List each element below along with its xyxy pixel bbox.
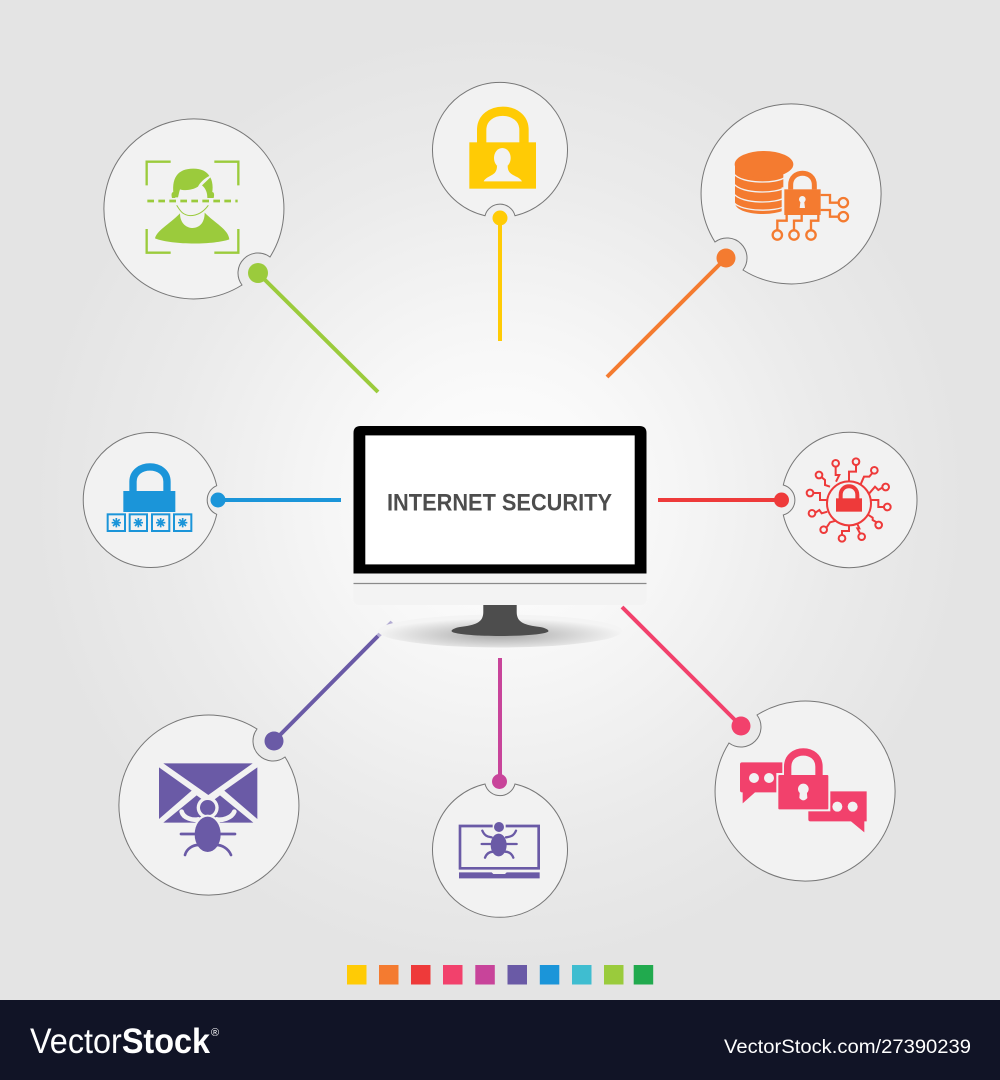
connector dot: red [774, 492, 789, 508]
connector dot: green [248, 263, 268, 283]
panel: email virus [119, 715, 299, 895]
icon: circuit padlock [807, 458, 891, 542]
title: INTERNET SECURITY [387, 490, 612, 516]
connector: orange [607, 258, 726, 377]
icon: padlock with password [108, 467, 191, 531]
panel: network lock [774, 432, 917, 568]
connector: yellow [498, 217, 502, 341]
colour legend [347, 965, 653, 984]
registered mark: ® [211, 1027, 219, 1039]
footer url: VectorStock.com/27390239 [724, 1036, 971, 1058]
connector dot: pink [732, 716, 750, 736]
panel: laptop virus [432, 774, 568, 917]
footer bar [0, 1000, 1000, 1080]
connector dot: magenta [492, 774, 507, 789]
monitor shadow [378, 614, 622, 648]
panel: secure chat [715, 701, 895, 881]
icon: database with lock [734, 151, 848, 240]
connector: red [658, 498, 781, 502]
panel: database security [701, 104, 881, 284]
connector dot: orange [716, 248, 736, 268]
monitor stand [452, 604, 548, 636]
panel: face recognition [104, 119, 284, 299]
icon: padlock with user [469, 111, 536, 189]
monitor chin [354, 573, 646, 605]
connector: purple [274, 622, 392, 741]
connector: magenta [498, 658, 502, 781]
connector: pink [622, 607, 741, 726]
footer logo: VectorStock [30, 1022, 210, 1061]
connector dot: blue [210, 492, 226, 508]
icon: chat bubbles with lock [740, 752, 867, 832]
icon: face scan [147, 162, 238, 253]
connector: blue [218, 498, 341, 502]
connector dot: yellow [492, 210, 508, 226]
monitor bezel [354, 426, 646, 574]
connector dot: purple [264, 732, 284, 750]
icon: envelope with bug [159, 763, 257, 855]
panel: password lock [83, 432, 226, 568]
connector: green [258, 273, 378, 392]
chin line [354, 582, 646, 584]
monitor screen [365, 435, 635, 564]
monitor [354, 426, 646, 648]
panel: locked user [432, 82, 568, 226]
icon: laptop with bug [459, 822, 540, 878]
